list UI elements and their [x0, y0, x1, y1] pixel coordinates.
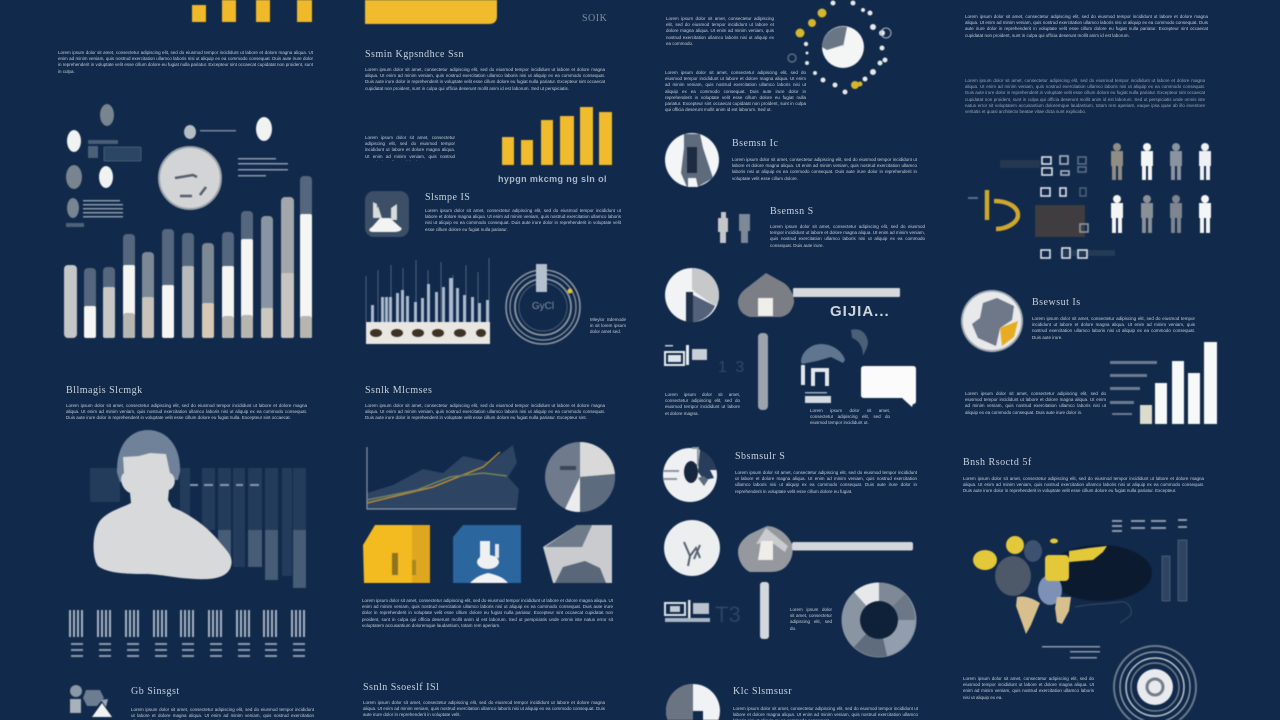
- text block: Lorem ipsum dolor sit amet, consectetur adipiscing elit, sed do eiusmod tempor incididunt ut labore et dolore magna aliqua. Ut enim ad minim veniam, quis nostrud exercitation ullamco laboris nisi ut aliquip ex ea commodo consequat. Duis aute irure dolor in reprehenderit in voluptate velit esse cillum dolore eu fugiat nulla pariatur.: [425, 208, 621, 232]
- text block: Lorem ipsum dolor sit amet, consectetur adipiscing elit, sed do eiusmod tempor incididunt ut labore et dolore magna aliqua. Ut enim ad minim veniam, quis nostrud exercitation ullamco laboris nisi ut aliquip ex ea commodo consequat. Duis aute irure dolor in reprehenderit in voluptate velit esse cillum dolore eu fugiat nulla pariatur. Excepteur sint occaecat cupidatat non proident, sunt in culpa qui officia deserunt mollit anim id est laborum. Sed ut perspiciatis unde omnis iste natus error sit voluptatem accusantium doloremque laudantium, totam rem aperiam, eaque ipsa quae ab illo inventore veritatis et quasi architecto beatae vitae dicta sunt explicabo.: [965, 78, 1205, 114]
- donut chart: [842, 582, 916, 658]
- heading: Bsemsn Ic: [732, 138, 778, 149]
- icon: circle five: [666, 684, 720, 720]
- label: top right: SOIK: [582, 13, 607, 24]
- bar chart: yellow top bars: [192, 0, 312, 22]
- label: garbled title: GIJIA...: [830, 303, 890, 320]
- text block: Lorem ipsum dolor sit amet, consectetur adipiscing elit, sed do eiusmod tempor incididunt ut labore et dolore magna aliqua. Ut enim ad minim veniam, quis nostrud exercitation ullamco laboris nisi ut aliquip ex ea commodo consequat. Duis aute irure dolor in reprehenderit in voluptate velit esse cillum dolore eu fugiat nulla pariatur. Excepteur.: [963, 476, 1204, 493]
- bar: vertical grey: [758, 333, 768, 410]
- bar chart: thirteen capsule bars: [64, 176, 312, 338]
- panel: column two: [362, 0, 626, 717]
- heading: Bnsh Rsoctd 5f: [963, 457, 1032, 468]
- banner: yellow top bar: [365, 0, 497, 24]
- icon: large grey globe: [159, 147, 221, 209]
- text block: Lorem ipsum dolor sit amet, consectetur adipiscing elit, sed do eiusmod tempor incididunt ut labore et dolore magna aliqua. Ut enim ad minim veniam, quis nostrud exercitation ullamco laboris nisi ut aliquip ex ea commodo consequat. Duis aute irure dolor in reprehenderit in voluptate velit.: [363, 700, 605, 717]
- icon: circle four: [664, 520, 720, 576]
- icon: portrait heads: [66, 104, 272, 218]
- icon: circle three: [663, 448, 718, 502]
- heading: Bsewsut Is: [1032, 297, 1081, 308]
- text block: Lorem ipsum dolor sit amet, consectetur adipiscing elit, sed do eiusmod tempor incididunt ut labore et dolore magna aliqua. Ut enim ad minim veniam, quis nostrud exercitation ullamco laboris nisi ut aliquip ex ea.: [963, 676, 1094, 700]
- icon: globe: [961, 290, 1023, 352]
- text block: Lorem ipsum dolor sit amet, consectetur adipiscing elit, sed do eiusmod tempor incididunt ut labore et dolore magna.: [665, 392, 740, 416]
- panel: column one: [58, 0, 314, 720]
- text block: Lorem ipsum dolor sit amet, consectetur adipiscing elit, sed do eiusmod tempor incididunt ut labore et dolore magna aliqua. Ut enim ad minim veniam, quis nostrud exercitation ullamco laboris nisi ut aliquip ex ea commodo consequat. Duis aute irure.: [1032, 316, 1195, 340]
- text block: Lorem ipsum dolor sit amet, consectetur adipiscing elit, sed do eiusmod tempor incididunt ut labore et dolore magna aliqua. Ut enim ad minim veniam, quis nostrud exercitation ullamco laboris nisi ut aliquip ex ea commodo consequat. Duis aute irure dolor in reprehenderit in voluptate velit esse cillum dolore eu fugiat.: [735, 470, 917, 494]
- chart caption: hypgn mkcmg ng sln ol: [498, 174, 607, 184]
- chart: area and trend lines: [367, 445, 519, 509]
- block: dark smudges: [1000, 160, 1115, 256]
- icons: standing figures: [1111, 143, 1211, 233]
- swoosh: [851, 329, 868, 356]
- heading: Ssnln Ssoeslf ISl: [363, 682, 439, 693]
- icon: yellow loop: [968, 190, 1018, 229]
- icon: figures small: [718, 212, 750, 243]
- heading: Bllmagis Slcmgk: [66, 385, 143, 396]
- text block: Lorem ipsum dolor sit amet, consectetur adipiscing elit, sed do eiusmod tempor incididunt ut labore et dolore magna aliqua. Ut enim ad minim veniam, quis nostrud exercitation ullamco laboris nisi ut aliquip ex ea commodo consequat. Duis aute irure dolor in reprehenderit in voluptate velit esse cillum dolore eu fugiat nulla pariatur. Excepteur sint occaecat cupidatat non proident, sunt in culpa qui officia deserunt mollit anim id est laborum. Sed ut.: [665, 70, 806, 112]
- text block: donut caption: Lorem ipsum dolor sit amet, consectetur adipiscing elit, sed do.: [790, 607, 832, 631]
- legend boxes next to heads: [66, 130, 288, 227]
- bar chart: dark columns behind person: [90, 468, 306, 588]
- heading: Gb Sinsgst: [131, 686, 180, 697]
- icon: hexagon cluster: [70, 685, 112, 717]
- icon: concentric seal: [1114, 646, 1196, 720]
- icon: circle one: [665, 133, 719, 187]
- icon: circle two: [665, 268, 719, 322]
- icon: garbled tag two: T3: [715, 602, 741, 627]
- text block: Lorem ipsum dolor sit amet, consectetur adipiscing elit, sed do eiusmod tempor incididunt ut labore et dolore magna aliqua. Ut enim ad minim veniam, quis nostrud exercitation ullamco laboris nisi ut aliquip ex ea commodo.: [666, 16, 774, 46]
- text block: Lorem ipsum dolor sit amet, consectetur adipiscing elit, sed do eiusmod tempor incididunt ut labore et dolore magna aliqua. Ut enim ad minim veniam, quis nostrud exercitation ullamco laboris nisi ut aliquip ex ea commodo consequat. Duis aute irure dolor in reprehenderit in voluptate velit esse cillum dolore.: [732, 157, 917, 181]
- heading: Bsemsn S: [770, 206, 814, 217]
- panel: column four: [960, 14, 1218, 720]
- icon: house pin two: [738, 526, 913, 639]
- tile: blue: [453, 525, 521, 583]
- tile: yellow: [363, 525, 430, 583]
- heading: Ssnlk Mlcmses: [365, 385, 432, 396]
- callout: speech bubble: [861, 366, 916, 407]
- heading: Slsmpe IS: [425, 192, 470, 203]
- icon: concentric ring with device: GyCl: [532, 301, 554, 312]
- bar chart: white bars: [1110, 342, 1217, 424]
- text block: Lorem ipsum dolor sit amet, consectetur adipiscing elit, sed do eiusmod tempor incididunt ut labore et dolore magna aliqua. Ut enim ad minim veniam, quis nostrud exercitation ullamco laboris nisi ut aliquip ex ea commodo consequat. Duis aute irure dolor in reprehenderit in voluptate velit esse cillum dolore eu fugiat nulla pariatur. Excepteur sint occaecat cupidatat non proident, sunt in culpa qui officia deserunt mollit anim id est laborum. Sed ut perspiciatis.: [365, 67, 605, 91]
- icon row: nine small column glyphs: [69, 610, 305, 657]
- bar chart: yellow bars: [502, 107, 612, 165]
- pie chart: grey wedges: [545, 442, 615, 512]
- text block: intro: Lorem ipsum dolor sit amet, consectetur adipiscing elit, sed do eiusmod tempor incididunt ut labore et dolore magna aliqua. Ut enim ad minim veniam, quis nostrud exercitation ullamco laboris nisi ut aliquip ex ea commodo consequat. Duis aute irure dolor in reprehenderit in voluptate velit esse cillum dolore eu fugiat nulla pariatur. Excepteur sint occaecat cupidatat non proident, sunt in culpa.: [58, 50, 313, 74]
- icon: garbled tag two: [665, 600, 741, 627]
- text block: Lorem ipsum dolor sit amet, consectetur adipiscing elit, sed do eiusmod tempor incididunt ut labore et dolore magna aliqua. Ut enim ad minim veniam, quis nostrud exercitation ullamco laboris nisi ut aliquip ex ea commodo consequat. Duis aute irure dolor in reprehenderit in voluptate velit esse cillum dolore eu fugiat nulla. Excepteur sint occaecat.: [66, 403, 307, 420]
- table glyphs above map: [1042, 519, 1187, 658]
- text block: ring caption: Mleylor Sdemode in sit lorem ipsum dolor amet sed.: [590, 317, 626, 334]
- icon: person silhouette: [94, 430, 232, 579]
- tile: grey landscape: [543, 525, 612, 583]
- icon: garbled tag: 1 3: [718, 359, 746, 376]
- text block: Lorem ipsum dolor sit amet, consectetur adipiscing elit, sed do eiusmod tempor incididunt ut labore et dolore magna aliqua. Ut enim ad minim veniam, quis nostrud exercitation ullamco laboris nisi ut aliquip ex ea commodo consequat. Duis aute irure dolor in reprehenderit in voluptate velit esse cillum dolore eu fugiat nulla pariatur. Excepteur sint occaecat cupidatat non proident, sunt in culpa qui officia deserunt mollit anim id est laborum. Sed ut perspiciatis unde omnis iste natus error sit voluptatem accusantium doloremque laudantium, totam rem aperiam.: [362, 598, 613, 628]
- text block: dome caption: Lorem ipsum dolor sit amet, consectetur adipiscing elit, sed do eiusmod tempor incididunt ut.: [810, 408, 890, 425]
- icon: ring of dots around pie: [788, 0, 891, 94]
- heading: Klc Slsmsusr: [733, 686, 792, 697]
- text block: Lorem ipsum dolor sit amet, consectetur adipiscing elit, sed do eiusmod tempor incididunt ut labore et dolore magna aliqua. Ut enim ad minim veniam, quis nostrud exercitation ullamco laboris nisi ut aliquip ex ea commodo consequat. Duis aute irure.: [770, 224, 925, 248]
- text block: Lorem ipsum dolor sit amet, consectetur adipiscing elit, sed do eiusmod tempor incididunt ut labore et dolore magna aliqua. Ut enim ad minim veniam, quis nostrud exercitation ullamco laboris nisi ut aliquip ex ea commodo consequat. Duis aute irure dolor in reprehenderit in voluptate velit esse cillum dolore eu fugiat nulla pariatur. Excepteur sint.: [365, 403, 605, 420]
- text block: Lorem ipsum dolor sit amet, consectetur adipiscing elit, sed do eiusmod tempor incididunt ut labore et dolore magna aliqua. Ut enim ad minim veniam, quis nostrud exercitation ullamco laboris nisi ut aliquip ex ea commodo consequat. Duis aute irure dolor in reprehenderit in voluptate velit esse cillum dolore eu fugiat nulla pariatur. Excepteur sint occaecat cupidatat non proident, sunt in culpa qui officia deserunt mollit anim id est laborum.: [965, 14, 1208, 38]
- icon: dome: [801, 344, 845, 403]
- text block: Lorem ipsum dolor sit amet, consectetur adipiscing elit, sed do eiusmod tempor incididunt ut labore et dolore magna aliqua. Ut enim ad minim veniam, quis nostrud exercitation ullamco laboris nisi ut aliquip ex ea commodo consequat. Duis aute irure dolor in.: [965, 391, 1106, 415]
- icon: garbled tag: [665, 345, 746, 376]
- icon: concentric ring with device: [506, 264, 580, 344]
- icon: house pin one: [738, 273, 900, 317]
- heading: Ssmin Kgpsndhce Ssn: [365, 49, 464, 60]
- grid: small glyph boxes: [1041, 156, 1088, 258]
- heading: Sbsmsulr S: [735, 451, 785, 462]
- map: world blobs: [973, 536, 1152, 634]
- chart: histogram with tray: [366, 258, 490, 344]
- panel: column three: [662, 0, 925, 720]
- icon: rounded photo square: [365, 191, 409, 237]
